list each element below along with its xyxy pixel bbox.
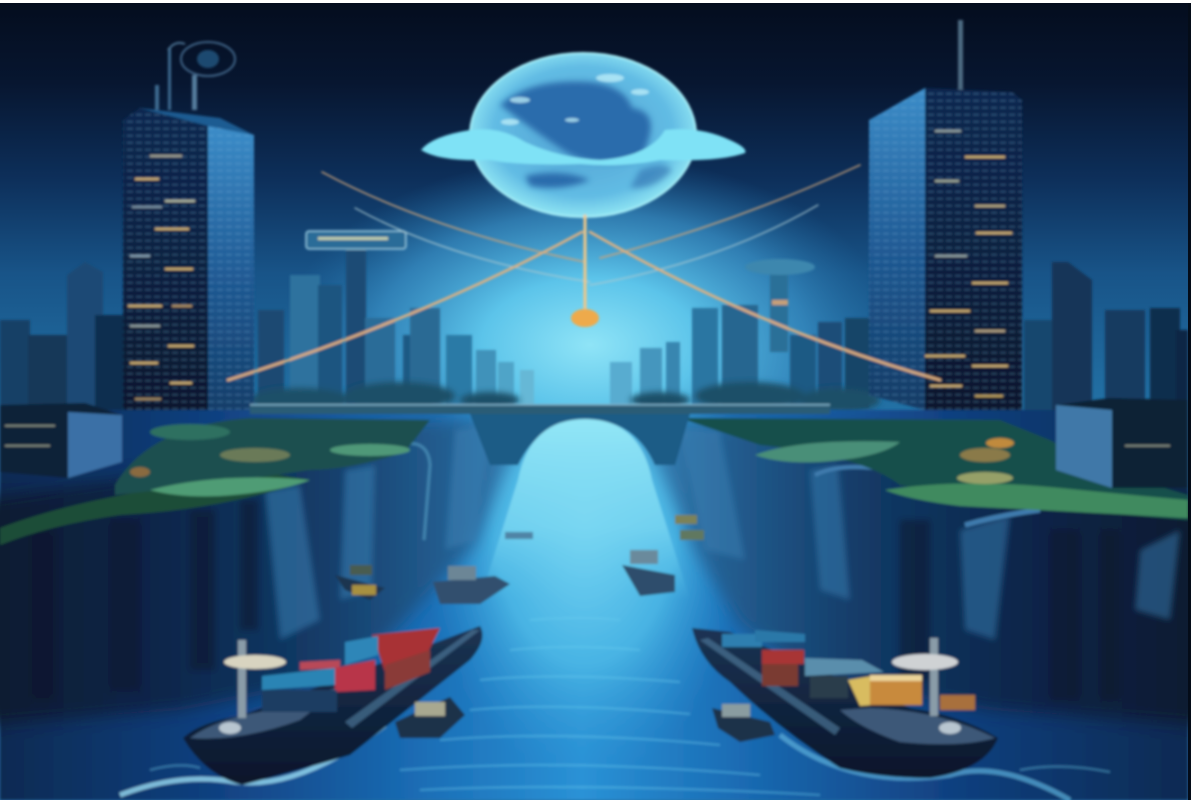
globe with cloud ring bbox=[421, 53, 745, 217]
arrow: left tower link bbox=[228, 232, 582, 380]
low building right bbox=[1056, 398, 1188, 488]
cargo ship right bbox=[692, 628, 1070, 800]
tower window lights bbox=[925, 130, 1012, 397]
network connection lines bbox=[228, 165, 940, 380]
right tower bbox=[869, 20, 1022, 412]
small boat right bbox=[712, 704, 775, 742]
icon: golden node bbox=[571, 309, 599, 327]
left cliff bbox=[0, 418, 535, 725]
arrow: downlink from globe bbox=[584, 216, 586, 312]
left tower bbox=[123, 42, 254, 425]
icon: platform tower right bbox=[745, 259, 815, 352]
icon: platform tower left bbox=[306, 231, 406, 340]
stone bridge bbox=[250, 404, 830, 600]
arrow: right tower link bbox=[590, 232, 940, 380]
small boat left bbox=[395, 697, 465, 738]
right cliff bbox=[635, 418, 1200, 725]
distant skyline left bbox=[0, 250, 1188, 420]
low building left bbox=[0, 403, 122, 478]
water ripples bbox=[150, 618, 1110, 795]
distant boats bbox=[335, 515, 704, 604]
cargo ship left bbox=[120, 626, 482, 795]
tower window lights bbox=[128, 155, 195, 400]
river surface bbox=[0, 410, 1188, 800]
